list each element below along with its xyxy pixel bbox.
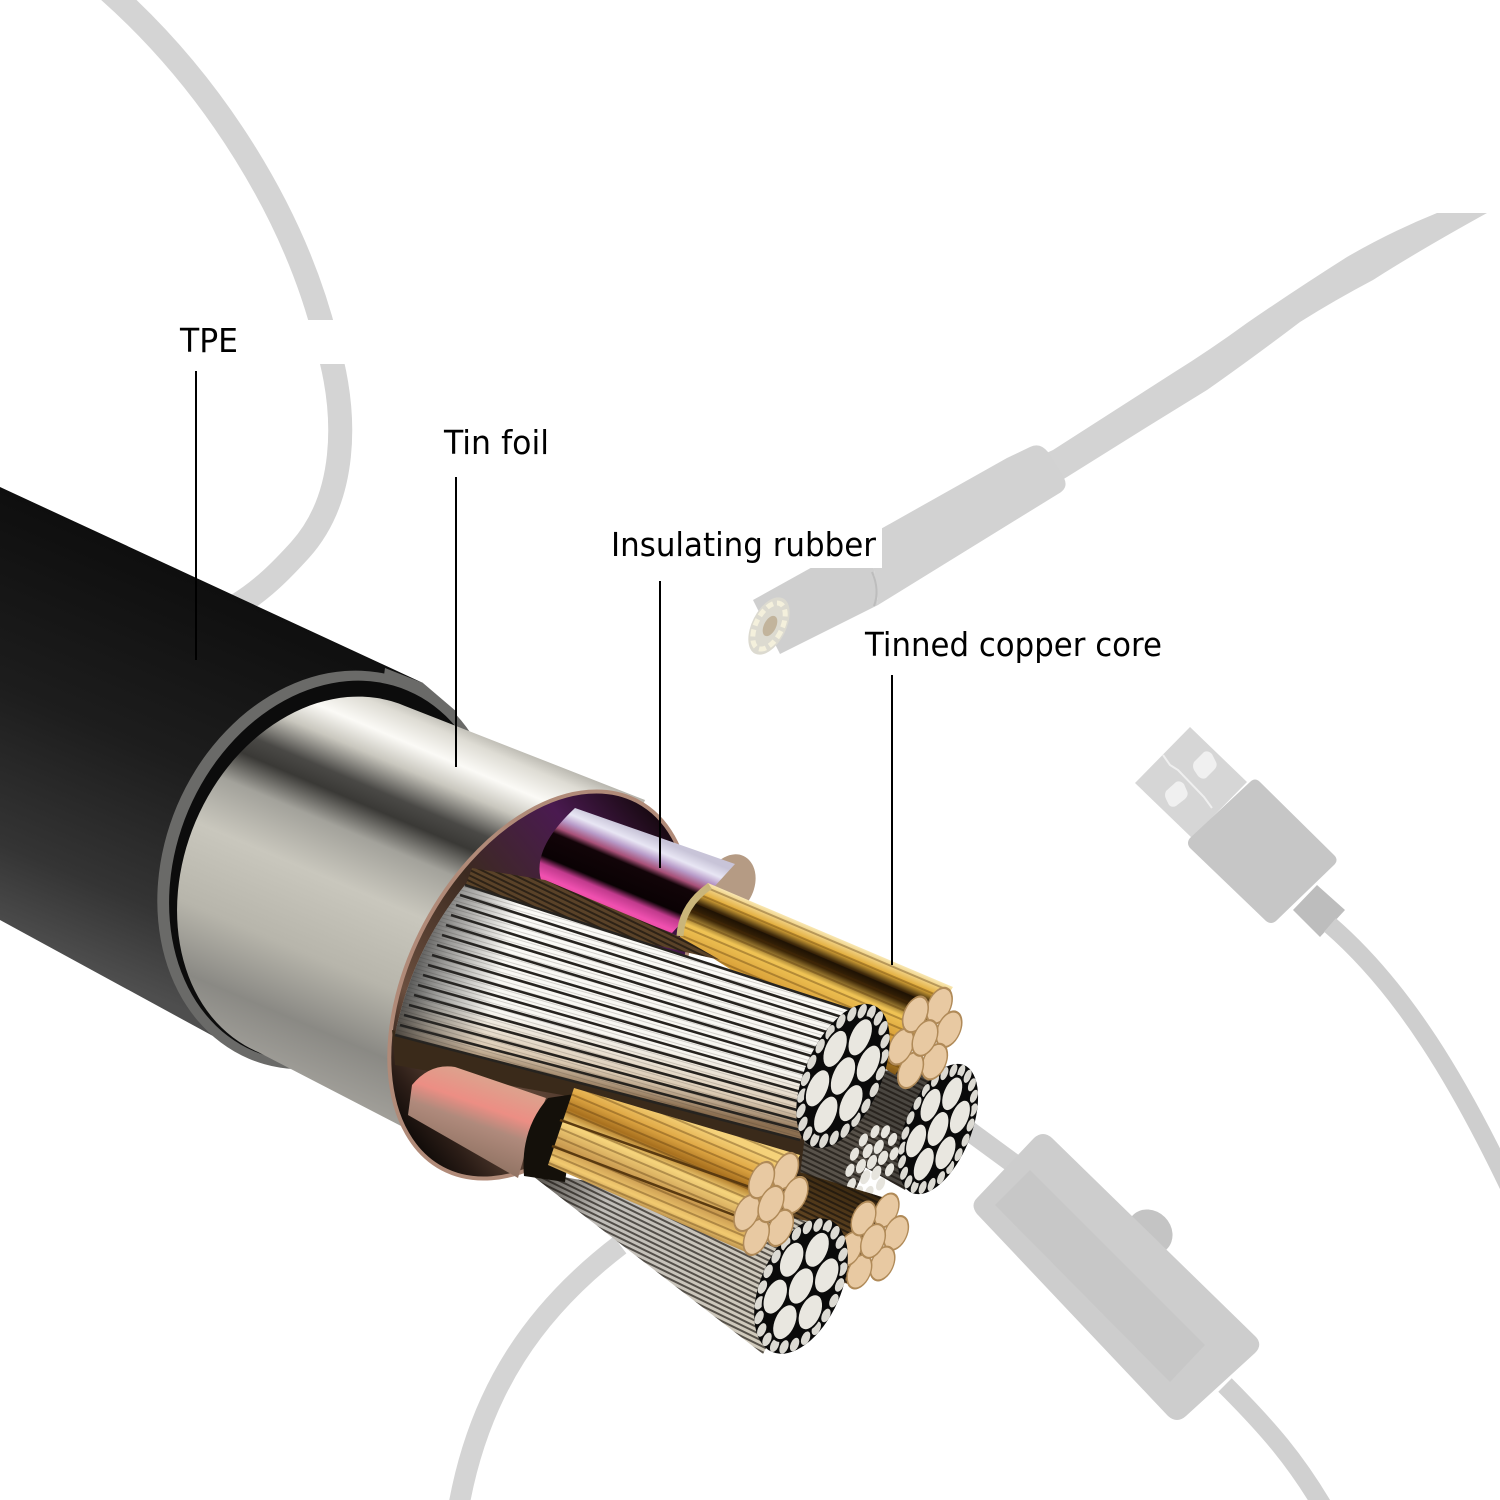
middle gold conductors bbox=[548, 1088, 800, 1253]
silver face: large bbox=[777, 990, 909, 1162]
thin strand face bbox=[835, 1116, 909, 1208]
silver face: lower bbox=[735, 1204, 867, 1368]
large silver bundle bbox=[395, 885, 858, 1140]
background cable: usb lead bbox=[1330, 925, 1500, 1185]
background cable: top right to probe bbox=[1040, 213, 1487, 486]
label: TPE: TPE bbox=[179, 321, 238, 360]
label: Insulating rubber bbox=[610, 525, 882, 868]
small thin bundle bbox=[670, 1080, 884, 1198]
lower copper bundle bbox=[740, 1160, 892, 1285]
background cable: top left loop bbox=[108, 0, 340, 606]
jacket end rim bbox=[97, 617, 561, 1123]
background cable: bottom loop bbox=[459, 1245, 620, 1500]
lower rubber sleeve bbox=[408, 1066, 546, 1178]
inline switch box bbox=[965, 1128, 1322, 1500]
endoscope probe bbox=[740, 445, 1066, 661]
tin foil sleeve bbox=[177, 697, 645, 1172]
brown strands above silver bundle bbox=[460, 868, 720, 960]
white mask behind TPE gap bbox=[300, 320, 370, 364]
dark collar at base of gold strands bbox=[524, 1092, 588, 1182]
label: Tinned copper core: Tinned copper core bbox=[864, 625, 1162, 664]
upper gold conductors bbox=[680, 883, 953, 1075]
insulating rubber sleeve: upper bbox=[539, 808, 735, 933]
tan disc behind rubber bbox=[695, 846, 765, 924]
gold face: lower bbox=[826, 1182, 920, 1300]
outer TPE jacket bbox=[0, 487, 423, 1060]
right dark silver bundle bbox=[800, 1066, 955, 1190]
lower silver bundle bbox=[525, 1170, 830, 1354]
gold face: upper bbox=[876, 977, 974, 1099]
dark strands under silver bundle bbox=[392, 1030, 805, 1175]
label: Tin foil: Tin foil bbox=[443, 423, 549, 462]
foil opening bbox=[328, 740, 752, 1230]
silver face: right bbox=[882, 1053, 994, 1205]
usb plug bbox=[1135, 727, 1345, 937]
label: Insulating rubber: Insulating rubber bbox=[611, 525, 876, 564]
gold face: middle bbox=[722, 1142, 820, 1266]
